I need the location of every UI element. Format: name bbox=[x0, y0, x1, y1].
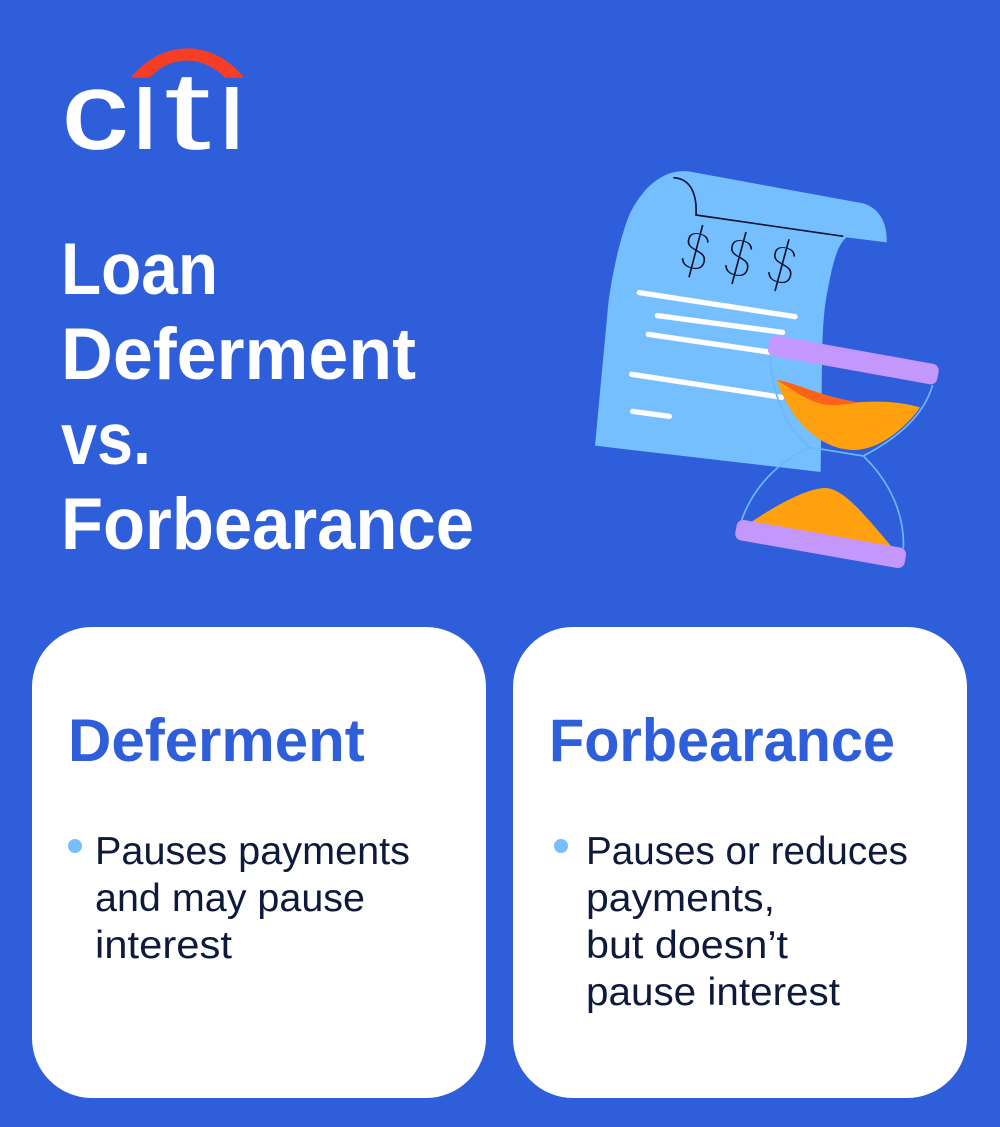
top bar bbox=[767, 335, 940, 385]
dollar signs bbox=[674, 217, 803, 300]
lower sand bbox=[752, 488, 892, 547]
upper sand shadow bbox=[777, 380, 858, 405]
bill paper bbox=[595, 171, 887, 472]
panel: forbearance bbox=[513, 627, 967, 1098]
forbearance heading: Forbearance bbox=[549, 707, 895, 774]
dollar signs: $ bbox=[674, 217, 717, 286]
logo: citi bbox=[66, 48, 244, 150]
logo: citi: i bbox=[131, 37, 159, 176]
logo: citi: c bbox=[62, 51, 128, 171]
deferment text bbox=[95, 830, 410, 967]
deferment bullet bbox=[68, 839, 82, 853]
title: Forbearance bbox=[61, 484, 474, 565]
illustration: bill and hourglass bbox=[595, 171, 940, 569]
deferment text: Pauses payments bbox=[95, 830, 410, 873]
logo: citi: i bbox=[218, 37, 246, 176]
dollar signs: $ bbox=[760, 231, 803, 300]
title: vs. bbox=[61, 399, 151, 480]
logo: citi: t bbox=[164, 49, 211, 173]
deferment heading: Deferment bbox=[68, 707, 365, 774]
logo arc bbox=[131, 48, 244, 78]
forbearance text: payments, bbox=[586, 877, 775, 920]
forbearance text: but doesn’t bbox=[586, 924, 788, 967]
forbearance bullet bbox=[554, 839, 568, 853]
title bbox=[61, 229, 474, 565]
title: Loan bbox=[61, 229, 218, 310]
bill text lines bbox=[632, 293, 795, 416]
panel: deferment bbox=[32, 627, 486, 1098]
bill header line bbox=[673, 178, 843, 236]
deferment text: interest bbox=[95, 924, 232, 967]
forbearance text bbox=[586, 830, 908, 1014]
deferment text: and may pause bbox=[95, 877, 365, 920]
upper sand bbox=[777, 380, 920, 450]
title: Deferment bbox=[61, 314, 416, 395]
hourglass glass bbox=[742, 357, 933, 548]
forbearance text: pause interest bbox=[586, 971, 840, 1014]
bottom bar bbox=[734, 519, 907, 569]
dollar signs: $ bbox=[717, 224, 760, 293]
forbearance text: Pauses or reduces bbox=[586, 830, 908, 873]
dollar sign bars bbox=[689, 225, 789, 291]
